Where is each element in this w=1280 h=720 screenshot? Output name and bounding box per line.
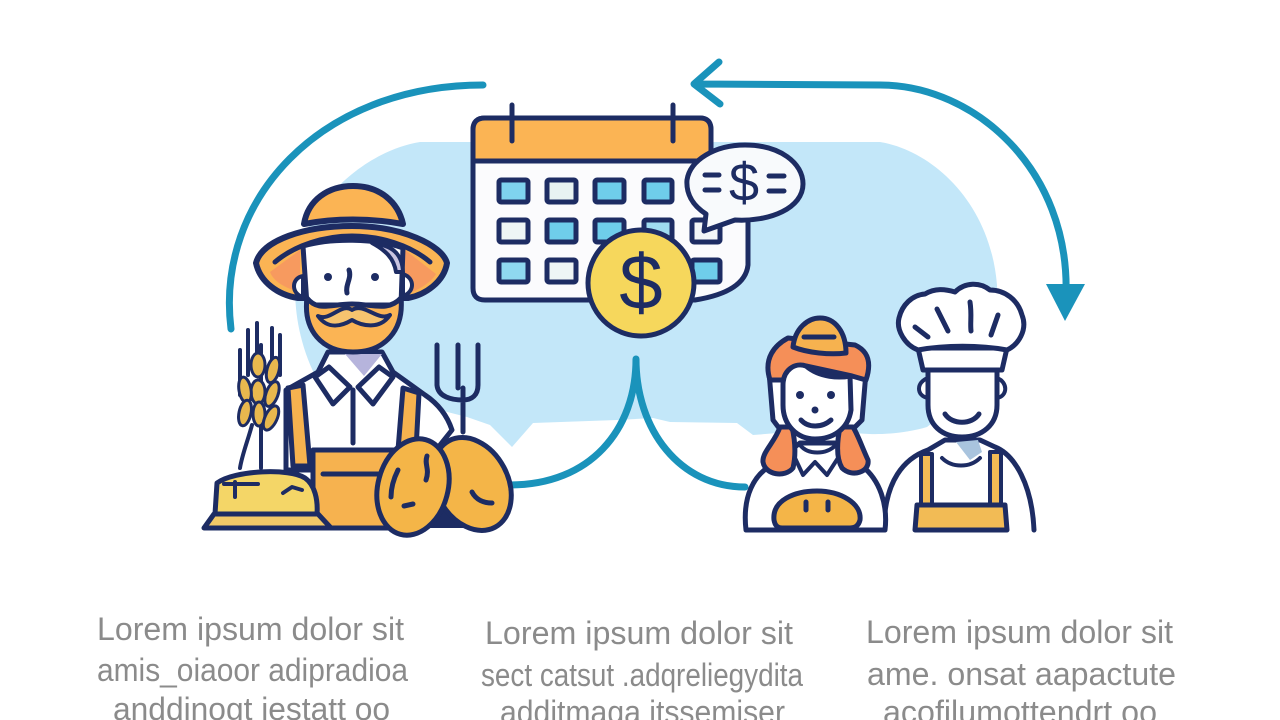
chef face (928, 368, 997, 437)
chef ears (919, 378, 1005, 398)
caption: left column (97, 611, 408, 720)
chef figure (884, 284, 1034, 530)
background blob (295, 142, 1000, 447)
chef body (884, 440, 1034, 530)
arrow: farmer to calendar (229, 85, 483, 329)
potatoes (367, 424, 527, 544)
farmer eyes and nose (324, 273, 332, 281)
cycle arrows (229, 62, 1085, 487)
calendar body (473, 118, 748, 300)
caption: middle column: Lorem ipsum dolor sit (485, 615, 793, 651)
farmer face (303, 240, 403, 305)
coin with dollar (588, 230, 694, 336)
arrow: central split curves (510, 359, 745, 487)
caption: left column: Lorem ipsum dolor sit (97, 611, 404, 647)
arrow: back to calendar with chevron head (694, 62, 1066, 295)
farmer hat underside line (275, 236, 430, 262)
chef neck shadow (956, 440, 982, 460)
calendar header (473, 118, 711, 161)
chef hat band (918, 348, 1007, 370)
chef neckline (942, 458, 980, 466)
farmer shirt (286, 352, 452, 470)
woman body (745, 443, 886, 530)
caption: middle column: sect catsut .adqreliegydita (481, 657, 803, 693)
farmer hat inner orange (270, 250, 436, 294)
woman hat (793, 318, 846, 354)
woman side hair outline (769, 372, 866, 432)
farmer beard (306, 298, 401, 352)
woman loaf (774, 491, 860, 528)
farmer apron (313, 450, 395, 528)
calendar icon (473, 105, 803, 336)
woman hair (768, 338, 869, 380)
farmer figure (204, 186, 527, 544)
arrow head: down triangle (1046, 284, 1085, 321)
caption: right column: ame. onsat aapactute (867, 656, 1176, 692)
speech bubble with dollar (687, 145, 803, 231)
chef apron (915, 505, 1007, 530)
chef apron straps (921, 452, 1001, 505)
woman figure (745, 318, 886, 530)
farmer moustache (318, 308, 390, 326)
farmer hair strand (372, 243, 403, 272)
calendar date cells (499, 180, 720, 282)
caption: left column: amis_oiaoor adipradioa (97, 652, 408, 688)
chef hat puff (898, 284, 1024, 350)
farmer hat crown (304, 186, 403, 224)
caption: right column: Lorem ipsum dolor sit (866, 614, 1173, 650)
caption: middle column (481, 615, 803, 720)
coin with dollar: $ (619, 238, 663, 326)
farmer suspenders (288, 385, 419, 466)
woman braids (763, 427, 868, 474)
speech bubble with dollar: $ (729, 153, 759, 213)
woman face (783, 365, 851, 439)
caption: right column (866, 614, 1176, 720)
farmer hat brim (256, 226, 447, 298)
bread block on board (204, 472, 331, 528)
pitchfork (437, 345, 478, 432)
farmer ears (294, 274, 412, 297)
farmer neck shadow (345, 354, 382, 376)
wheat (236, 323, 282, 468)
woman collar (795, 445, 838, 475)
calendar rings (512, 105, 673, 141)
farmer collar (315, 367, 393, 404)
